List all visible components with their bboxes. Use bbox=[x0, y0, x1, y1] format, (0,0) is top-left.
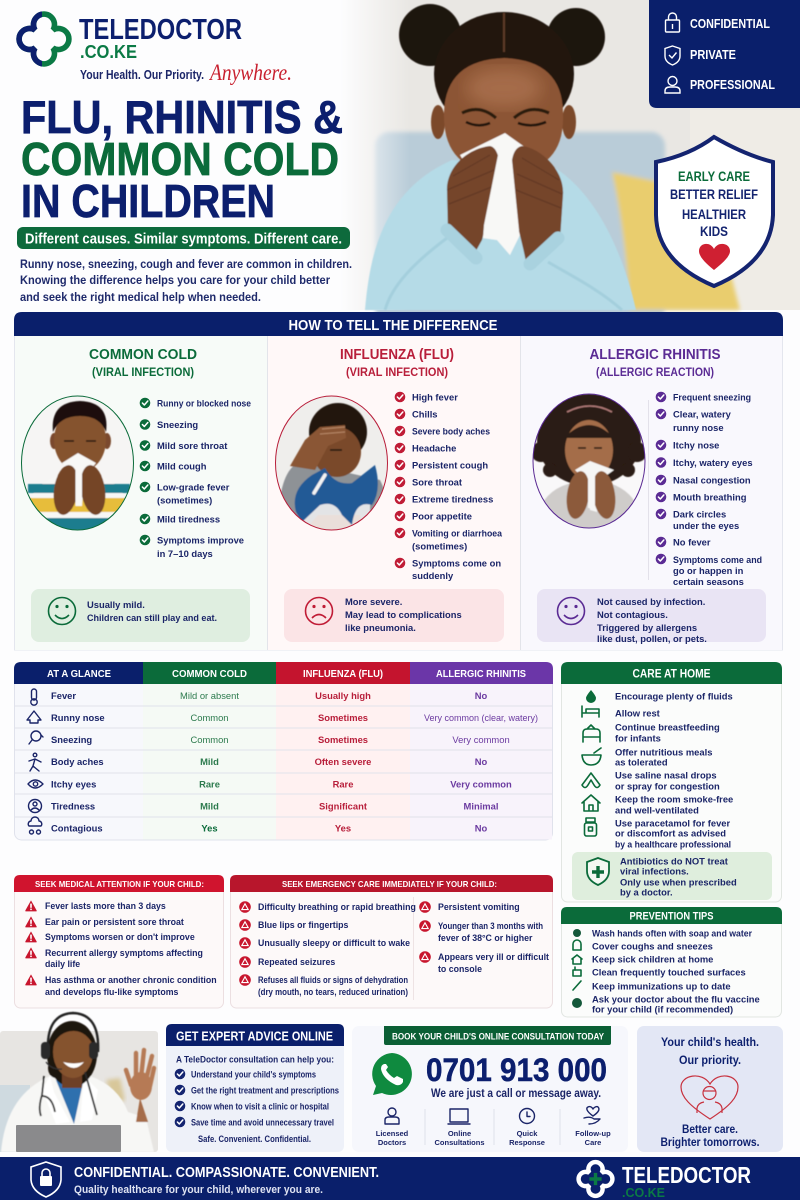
callout: not caused by infection bbox=[537, 589, 766, 644]
panel: seek emergency care bbox=[230, 875, 553, 1008]
emergency list right: Younger than 3 months with bbox=[438, 921, 543, 931]
column: influenza bbox=[276, 347, 504, 642]
symptom list: High fever bbox=[412, 392, 458, 402]
logo: Teledoctor: .CO.KE bbox=[80, 42, 137, 62]
emergency list left: Blue lips or fingertips bbox=[258, 920, 349, 930]
emergency list left bbox=[239, 901, 416, 997]
symptom list: Headache bbox=[412, 442, 456, 454]
banner: BOOK YOUR CHILD'S ONLINE CONSULTATION TODAY bbox=[392, 1032, 605, 1042]
callout: antibiotics bbox=[572, 852, 772, 900]
symptom list: go or happen in bbox=[673, 565, 744, 576]
panel: trust badges bbox=[649, 0, 800, 108]
row labels and icons: Sneezing bbox=[51, 734, 92, 745]
panel: prevention tips bbox=[561, 907, 782, 1017]
tagline pill bbox=[17, 227, 350, 249]
heading: SEEK EMERGENCY CARE IMMEDIATELY IF YOUR CHILD: bbox=[282, 879, 497, 889]
warning list: Has asthma or another chronic condition bbox=[45, 975, 217, 985]
row labels and icons: Fever bbox=[51, 690, 76, 701]
footer: CONFIDENTIAL. COMPASSIONATE. CONVENIENT. bbox=[74, 1165, 379, 1181]
care list: or spray for congestion bbox=[615, 780, 720, 792]
symptom list: certain seasons bbox=[673, 576, 744, 587]
symptom list: Sore throat bbox=[412, 476, 462, 488]
column: common cold: COMMON COLD bbox=[89, 347, 197, 363]
symptom list: Frequent sneezing bbox=[673, 392, 751, 402]
callout: antibiotics: by a doctor. bbox=[620, 886, 673, 898]
allergic rhinitis column values bbox=[424, 690, 538, 834]
logo: Teledoctor: TELEDOCTOR bbox=[79, 14, 242, 46]
care list: as tolerated bbox=[615, 756, 668, 768]
symptom list bbox=[395, 392, 503, 581]
shield badge: early care: KIDS bbox=[700, 224, 728, 239]
care list: Keep the room smoke-free bbox=[615, 794, 733, 804]
heading: GET EXPERT ADVICE ONLINE bbox=[176, 1030, 333, 1044]
care list: Allow rest bbox=[615, 708, 660, 718]
emergency list right bbox=[419, 901, 549, 974]
symptom list: Runny or blocked nose bbox=[157, 398, 251, 408]
callout: more severe bbox=[284, 589, 504, 642]
panel: seek medical attention bbox=[14, 875, 224, 1008]
emergency list left: Difficulty breathing or rapid breathing bbox=[258, 902, 416, 912]
care list: Offer nutritious meals bbox=[615, 746, 712, 758]
care list: and well-ventilated bbox=[615, 804, 699, 816]
common cold column values bbox=[180, 690, 239, 834]
feature: quick response bbox=[509, 1108, 545, 1147]
prevention list: Clean frequently touched surfaces bbox=[592, 966, 746, 977]
symptom list: Symptoms come and bbox=[673, 554, 762, 565]
logo: Teledoctor: Your Health. Our Priority. bbox=[80, 68, 204, 82]
influenza column values bbox=[315, 690, 371, 834]
feature: quick response: Quick bbox=[517, 1129, 538, 1138]
emergency list right: Persistent vomiting bbox=[438, 902, 520, 912]
callout: usually mild bbox=[31, 589, 250, 642]
heading bar bbox=[14, 312, 783, 336]
symptom list: Chills bbox=[412, 408, 438, 420]
panel: your child's health: Your child's health. bbox=[661, 1035, 759, 1049]
intro text: Knowing the difference helps you care for your child better bbox=[20, 275, 330, 287]
row labels and icons: Itchy eyes bbox=[51, 778, 96, 790]
panel: your child's health: Better care. bbox=[682, 1124, 738, 1136]
care list: Use paracetamol for fever bbox=[615, 818, 731, 828]
prevention list: Ask your doctor about the flu vaccine bbox=[592, 993, 760, 1004]
symptom list: Mild tiredness bbox=[157, 514, 220, 524]
row labels and icons: Runny nose bbox=[51, 712, 105, 723]
panel: your child's health bbox=[637, 1026, 783, 1152]
panel: book a consultation bbox=[352, 1026, 628, 1152]
table header: AT A GLANCE bbox=[47, 668, 111, 680]
heading bar: HOW TO TELL THE DIFFERENCE bbox=[288, 318, 498, 334]
warning list: Ear pain or persistent sore throat bbox=[45, 917, 184, 927]
feature: licensed doctors: Licensed bbox=[376, 1129, 409, 1138]
footer bbox=[0, 1157, 800, 1200]
icon: person bbox=[665, 76, 680, 93]
prevention list: Keep immunizations up to date bbox=[592, 980, 731, 991]
warning list: Fever lasts more than 3 days bbox=[45, 901, 166, 911]
common cold column values: Rare bbox=[199, 778, 220, 790]
intro text: Runny nose, sneezing, cough and fever are common in children. bbox=[20, 259, 352, 271]
common cold column values: Mild bbox=[200, 800, 219, 812]
warning list: Symptoms worsen or don't improve bbox=[45, 932, 195, 942]
callout: not caused by infection: like dust, pollen, or pets. bbox=[597, 633, 707, 644]
icon: whatsapp bbox=[372, 1053, 412, 1095]
footer: Quality healthcare for your child, wherever you are. bbox=[74, 1184, 323, 1196]
symptom list bbox=[140, 398, 251, 559]
callout: antibiotics: viral infections. bbox=[620, 866, 689, 876]
heading: SEEK MEDICAL ATTENTION IF YOUR CHILD: bbox=[35, 879, 204, 889]
phone number: 0701 913 000 bbox=[426, 1052, 607, 1088]
panel: trust badges: CONFIDENTIAL bbox=[690, 17, 770, 31]
influenza column values: Usually high bbox=[315, 690, 371, 701]
shield badge: early care bbox=[656, 137, 773, 286]
shield badge: early care: HEALTHIER bbox=[682, 207, 746, 222]
allergic rhinitis column values: Minimal bbox=[464, 800, 498, 812]
heading bbox=[561, 662, 782, 684]
tagline pill: Different causes. Similar symptoms. Different care. bbox=[25, 230, 342, 248]
callout: antibiotics: Only use when prescribed bbox=[620, 876, 737, 888]
panel: your child's health: Our priority. bbox=[679, 1053, 741, 1067]
benefits list: Understand your child's symptoms bbox=[191, 1069, 316, 1079]
logo: Teledoctor bbox=[19, 14, 292, 85]
photo: boy with fever bbox=[276, 396, 390, 530]
table header bbox=[14, 662, 553, 684]
symptom list: (sometimes) bbox=[412, 540, 467, 552]
feature: online consultations: Consultations bbox=[434, 1138, 484, 1147]
common cold column values: Mild or absent bbox=[180, 690, 239, 701]
symptom list: Mouth breathing bbox=[673, 492, 747, 502]
column: allergic rhinitis: ALLERGIC RHINITIS bbox=[590, 347, 721, 363]
symptom list: Low-grade fever bbox=[157, 482, 230, 492]
symptom list: runny nose bbox=[673, 422, 724, 433]
symptom list: Dark circles bbox=[673, 508, 726, 520]
callout: usually mild: Children can still play and eat. bbox=[87, 612, 217, 623]
panel: how to tell the difference bbox=[14, 312, 783, 650]
benefits list: Get the right treatment and prescriptions bbox=[191, 1085, 339, 1095]
icon: heart bbox=[699, 244, 730, 270]
panel: trust badges: PROFESSIONAL bbox=[690, 78, 775, 92]
prevention list: Cover coughs and sneezes bbox=[592, 940, 713, 951]
common cold column values: Yes bbox=[201, 822, 218, 834]
banner bbox=[384, 1026, 611, 1045]
feature: online consultations: Online bbox=[448, 1129, 471, 1138]
callout: usually mild: Usually mild. bbox=[87, 599, 145, 610]
feature: licensed doctors: Doctors bbox=[378, 1138, 406, 1147]
row labels and icons bbox=[27, 689, 105, 834]
common cold column values: Mild bbox=[200, 756, 219, 767]
emergency list right: Appears very ill or difficult bbox=[438, 952, 549, 962]
allergic rhinitis column values: No bbox=[475, 690, 488, 701]
feature: quick response: Response bbox=[509, 1138, 545, 1147]
care list: or discomfort as advised bbox=[615, 828, 726, 838]
photo: online doctor waving bbox=[0, 1013, 158, 1152]
feature: follow-up care: Follow-up bbox=[575, 1129, 611, 1138]
footer logo: TELEDOCTOR bbox=[622, 1162, 751, 1188]
shield badge: early care: EARLY CARE bbox=[678, 169, 750, 184]
warning list bbox=[25, 900, 217, 997]
callout: not caused by infection: Not contagious. bbox=[597, 609, 668, 620]
callout: not caused by infection: Triggered by allergens bbox=[597, 622, 697, 633]
callout: more severe: More severe. bbox=[345, 596, 402, 607]
callout: not caused by infection: Not caused by infection. bbox=[597, 596, 705, 607]
warning list: daily life bbox=[45, 959, 80, 969]
care list bbox=[582, 690, 733, 850]
icon: shield padlock bbox=[31, 1162, 61, 1197]
emergency list left: Repeated seizures bbox=[258, 957, 335, 967]
heading bbox=[14, 875, 224, 892]
panel: get expert advice online: A TeleDoctor consultation can help you: bbox=[176, 1054, 334, 1064]
symptom list: Nasal congestion bbox=[673, 474, 751, 486]
care list: for infants bbox=[615, 732, 661, 744]
symptom list: Mild sore throat bbox=[157, 440, 227, 451]
symptom list: Itchy, watery eyes bbox=[673, 457, 753, 468]
column: common cold: (VIRAL INFECTION) bbox=[92, 365, 194, 379]
feature: licensed doctors bbox=[376, 1108, 409, 1147]
heading bbox=[561, 907, 782, 924]
title: IN CHILDREN bbox=[21, 175, 275, 227]
shield badge: early care: BETTER RELIEF bbox=[670, 187, 758, 202]
intro text bbox=[20, 259, 352, 304]
heading bbox=[230, 875, 553, 892]
symptom list: in 7–10 days bbox=[157, 548, 213, 559]
table header: INFLUENZA (FLU) bbox=[303, 668, 383, 680]
panel: trust badges: PRIVATE bbox=[690, 48, 736, 62]
panel: care at home bbox=[561, 662, 782, 902]
heading bbox=[166, 1024, 344, 1046]
row labels and icons: Tiredness bbox=[51, 800, 95, 812]
table header: COMMON COLD bbox=[172, 668, 247, 680]
common cold column values: Common bbox=[190, 712, 229, 723]
title: COMMON COLD bbox=[21, 133, 339, 185]
symptom list: suddenly bbox=[412, 570, 454, 581]
panel: your child's health: Brighter tomorrows. bbox=[660, 1137, 760, 1149]
heading: PREVENTION TIPS bbox=[630, 910, 714, 922]
footer logo bbox=[579, 1162, 751, 1200]
symptom list: Clear, watery bbox=[673, 408, 732, 420]
emergency list left: (dry mouth, no tears, reduced urination) bbox=[258, 987, 408, 997]
symptom list: Extreme tiredness bbox=[412, 494, 493, 504]
column: influenza: (VIRAL INFECTION) bbox=[346, 365, 448, 379]
prevention list: Keep sick children at home bbox=[592, 953, 713, 964]
heading: CARE AT HOME bbox=[632, 666, 710, 680]
feature: follow-up care: Care bbox=[585, 1138, 601, 1147]
emergency list right: to console bbox=[438, 964, 482, 974]
panel: get expert advice online bbox=[166, 1024, 344, 1152]
icon: heart with child bbox=[681, 1076, 738, 1119]
symptom list: (sometimes) bbox=[157, 494, 212, 506]
symptom list: Poor appetite bbox=[412, 510, 472, 522]
prevention list: for your child (if recommended) bbox=[592, 1003, 733, 1014]
row labels and icons: Contagious bbox=[51, 822, 103, 834]
care list: by a healthcare professional bbox=[615, 838, 731, 850]
symptom list: Symptoms improve bbox=[157, 534, 244, 546]
footer logo: .CO.KE bbox=[622, 1185, 665, 1200]
influenza column values: Sometimes bbox=[318, 712, 368, 723]
title bbox=[21, 91, 343, 227]
influenza column values: Rare bbox=[333, 778, 353, 790]
row labels and icons: Body aches bbox=[51, 756, 104, 767]
allergic rhinitis column values: No bbox=[475, 756, 488, 767]
icon: padlock bbox=[666, 13, 680, 32]
symptom list: Sneezing bbox=[157, 419, 198, 430]
influenza column values: Significant bbox=[319, 800, 367, 812]
callout: more severe: May lead to complications bbox=[345, 609, 462, 620]
emergency list left: Unusually sleepy or difficult to wake bbox=[258, 938, 410, 948]
photo: girl with allergies bbox=[531, 394, 647, 530]
benefits list: Save time and avoid unnecessary travel bbox=[191, 1117, 334, 1127]
callout: antibiotics: Antibiotics do NOT treat bbox=[620, 855, 728, 866]
feature: online consultations bbox=[434, 1109, 484, 1147]
warning list: Recurrent allergy symptoms affecting bbox=[45, 948, 203, 958]
symptom list: No fever bbox=[673, 536, 711, 548]
column: allergic rhinitis: (ALLERGIC REACTION) bbox=[596, 365, 714, 379]
panel: book a consultation: We are just a call or message away. bbox=[431, 1088, 601, 1100]
feature: follow-up care bbox=[575, 1107, 611, 1147]
table: at a glance bbox=[14, 662, 553, 840]
benefits list: Know when to visit a clinic or hospital bbox=[191, 1101, 329, 1111]
emergency list right: fever of 38°C or higher bbox=[438, 933, 533, 943]
allergic rhinitis column values: Very common (clear, watery) bbox=[424, 712, 538, 723]
symptom list: Severe body aches bbox=[412, 426, 490, 436]
icon: shield check bbox=[665, 46, 680, 65]
hero photo: girl sneezing into a tissue bbox=[340, 0, 800, 322]
allergic rhinitis column values: No bbox=[475, 822, 488, 834]
prevention list bbox=[572, 927, 760, 1014]
common cold column values: Common bbox=[190, 734, 229, 745]
panel: get expert advice online: Safe. Convenient. Confidential. bbox=[198, 1134, 311, 1144]
column: allergic rhinitis bbox=[531, 347, 766, 644]
warning list: and develops flu-like symptoms bbox=[45, 987, 179, 997]
intro text: and seek the right medical help when needed. bbox=[20, 292, 261, 304]
title: FLU, RHINITIS & bbox=[21, 91, 343, 143]
table header: ALLERGIC RHINITIS bbox=[436, 668, 526, 680]
symptom list bbox=[656, 392, 762, 587]
symptom list: Itchy nose bbox=[673, 440, 719, 450]
influenza column values: Sometimes bbox=[318, 734, 368, 745]
symptom list: Mild cough bbox=[157, 460, 207, 472]
symptom list: Persistent cough bbox=[412, 460, 488, 470]
symptom list: Vomiting or diarrhoea bbox=[412, 528, 503, 538]
emergency list left: Refuses all fluids or signs of dehydration bbox=[258, 975, 408, 985]
allergic rhinitis column values: Very common bbox=[450, 778, 512, 790]
symptom list: under the eyes bbox=[673, 520, 739, 531]
callout: more severe: like pneumonia. bbox=[345, 622, 416, 633]
allergic rhinitis column values: Very common bbox=[452, 734, 510, 745]
column: influenza: INFLUENZA (FLU) bbox=[340, 347, 454, 363]
photo: boy with tissue bbox=[22, 396, 134, 530]
care list: Use saline nasal drops bbox=[615, 770, 717, 780]
influenza column values: Yes bbox=[335, 822, 351, 834]
column: common cold bbox=[22, 347, 251, 642]
influenza column values: Often severe bbox=[315, 756, 371, 767]
care list: Encourage plenty of fluids bbox=[615, 690, 733, 701]
logo: Teledoctor: Anywhere. bbox=[208, 60, 292, 85]
symptom list: Symptoms come on bbox=[412, 558, 501, 568]
benefits list bbox=[175, 1069, 339, 1127]
care list: Continue breastfeeding bbox=[615, 722, 720, 732]
prevention list: Wash hands often with soap and water bbox=[592, 927, 752, 938]
icon: medical cross logo bbox=[19, 14, 69, 64]
